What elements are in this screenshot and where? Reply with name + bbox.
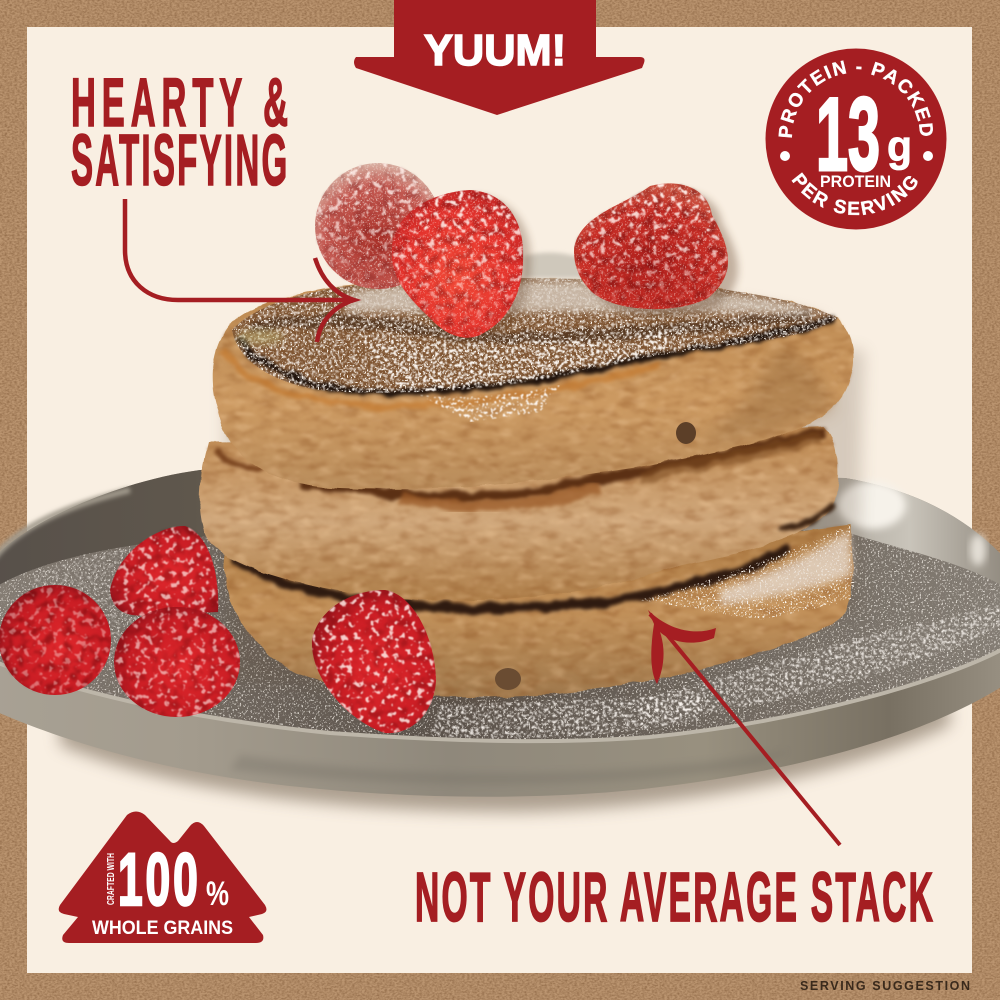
raspberry in front of stack [312, 590, 436, 733]
heading: hearty and satisfying: HEARTY & [71, 64, 288, 141]
arrow: to bottom pancake [648, 610, 840, 845]
percent: % [206, 875, 229, 913]
badge bottom text: PER SERVING [792, 172, 918, 216]
badge number: 13 [816, 77, 880, 193]
top pancake [213, 278, 854, 489]
right raspberry [574, 183, 738, 317]
plate photo [0, 470, 1000, 812]
front raspberry [392, 190, 531, 344]
plate shadow [60, 705, 950, 812]
bottom pancake [224, 524, 855, 697]
raspberry centre left [114, 607, 240, 717]
plate back wall [0, 470, 1000, 610]
banner text: YUUM! [424, 26, 566, 75]
raspberries on top [315, 163, 738, 344]
plate floor [0, 530, 1000, 741]
mountain badge: 100% whole grains [59, 812, 266, 943]
raspberry far left [0, 585, 111, 695]
badge label: PROTEIN [820, 173, 891, 191]
raspberries on plate [0, 526, 436, 733]
middle pancake [200, 426, 838, 600]
panel caption: serving suggestion: SERVING SUGGESTION [800, 979, 970, 993]
plate back lip behind berries [524, 253, 590, 278]
badge unit: g [887, 122, 912, 171]
100: 100 [118, 838, 198, 921]
plate rim light [0, 490, 130, 558]
pancake stack [200, 253, 864, 705]
badge top text: PROTEIN - PACKED [778, 60, 933, 138]
sugar on floor [0, 530, 1000, 741]
whole grains: WHOLE GRAINS [92, 918, 233, 939]
stack shadow [225, 350, 864, 705]
badge: 13g protein [766, 48, 946, 230]
heading: hearty and satisfying [71, 64, 288, 200]
heading: hearty and satisfying: SATISFYING [71, 119, 287, 200]
arrow: to top pancake [125, 199, 354, 342]
badge dots [780, 151, 933, 161]
crafted with: CRAFTED WITH [106, 853, 117, 905]
front rim highlight [0, 645, 1000, 741]
back raspberry [315, 163, 441, 289]
banner arrow: yuum [354, 0, 644, 115]
raspberry back left [110, 526, 218, 616]
plate body [0, 470, 1000, 797]
heading: not your average stack: NOT YOUR AVERAGE STACK [415, 857, 933, 936]
